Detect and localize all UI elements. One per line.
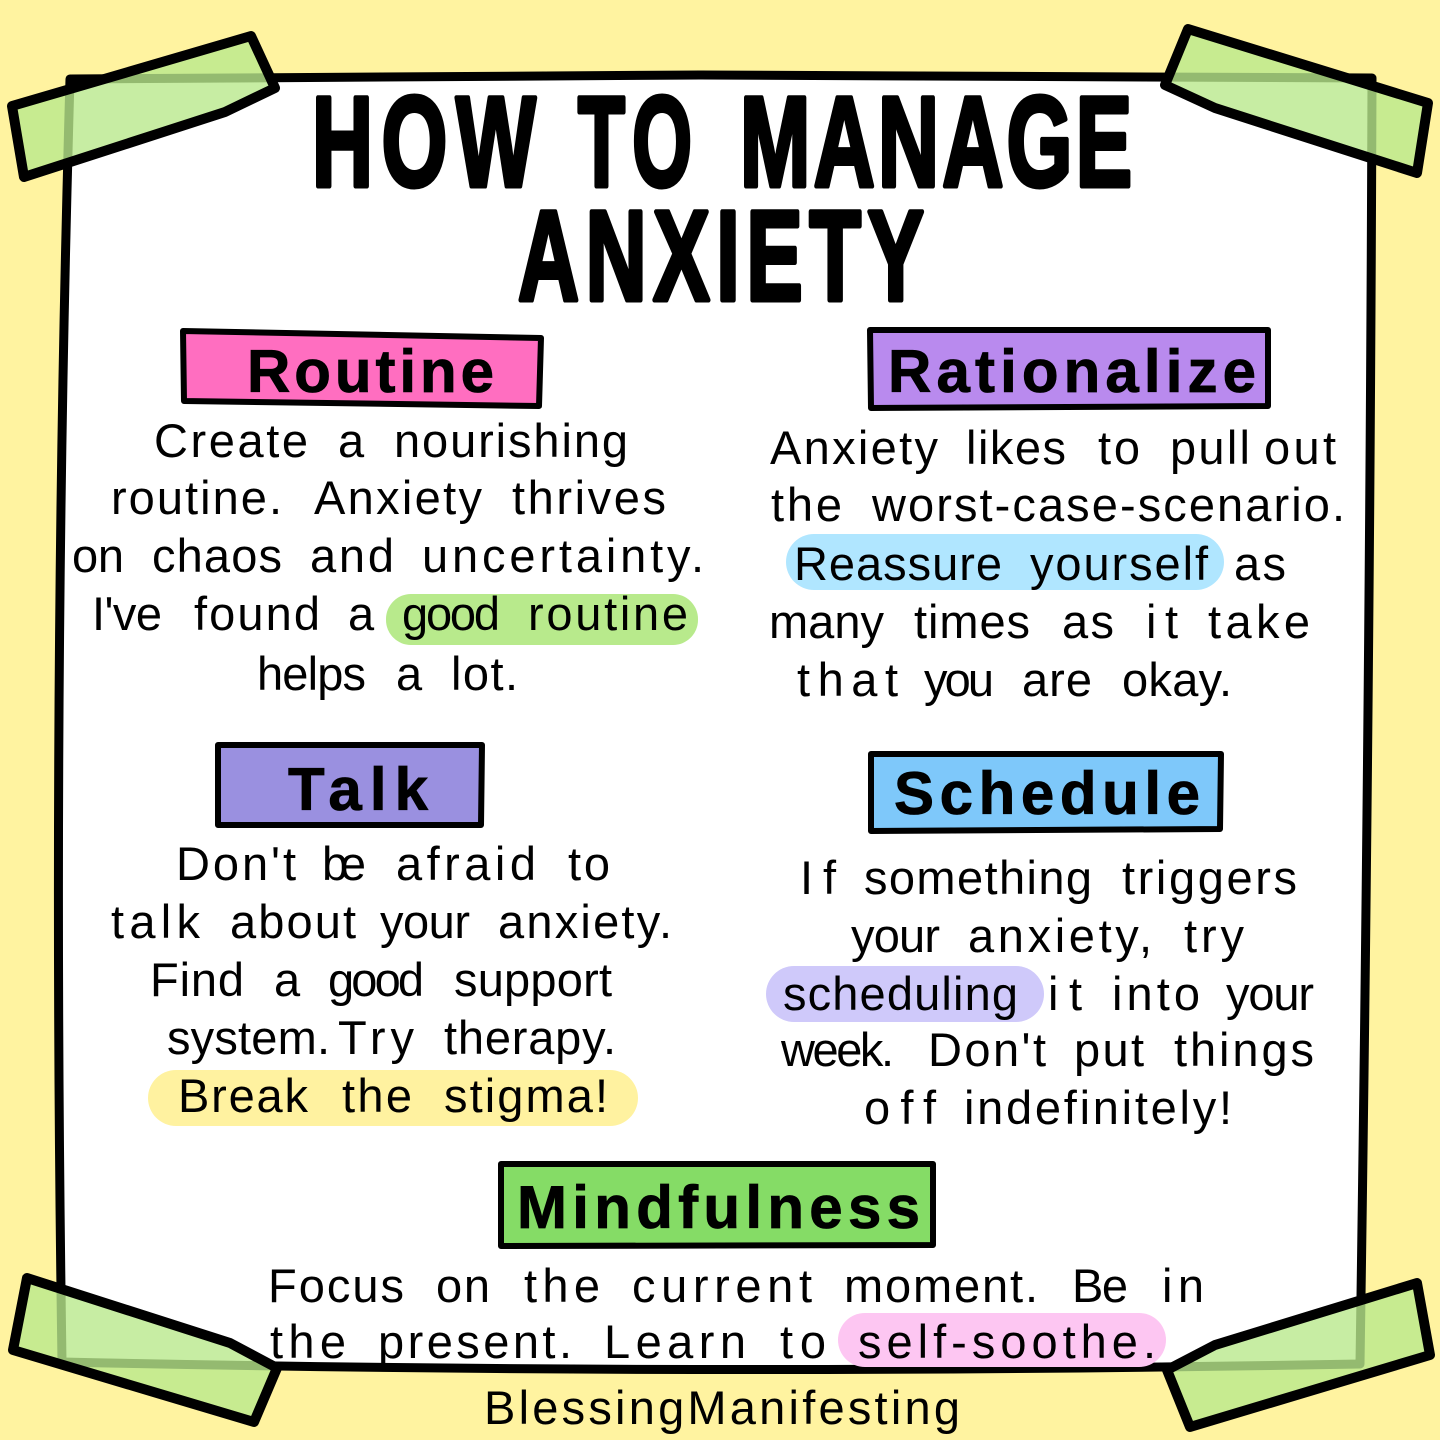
rationalize body text — [769, 421, 1345, 706]
talk body text: to — [568, 837, 610, 890]
schedule heading banner: Schedule — [894, 760, 1200, 827]
highlight: good routine — [386, 594, 698, 645]
rationalize body text: as — [1234, 537, 1286, 590]
routine body text: good — [402, 587, 500, 640]
rationalize body text: it — [1146, 595, 1178, 648]
mindfulness body text: in — [1162, 1259, 1204, 1312]
rationalize body text: Anxiety — [770, 421, 938, 474]
routine body text: nourishing — [394, 414, 628, 467]
mindfulness body text: Learn — [604, 1315, 746, 1368]
mindfulness body text: the — [270, 1315, 346, 1368]
routine body text: uncertainty. — [422, 529, 704, 582]
rationalize body text: take — [1208, 595, 1310, 648]
talk body text: Don't — [176, 837, 296, 890]
routine body text: helps — [257, 647, 366, 700]
talk heading banner: Talk — [288, 756, 429, 823]
schedule body text: scheduling — [783, 967, 1018, 1020]
highlight: reassure yourself — [786, 534, 1224, 590]
title — [312, 70, 1132, 327]
talk body text: afraid — [396, 837, 536, 890]
rationalize body text: yourself — [1030, 537, 1209, 590]
mindfulness heading banner: Mindfulness — [517, 1174, 920, 1241]
schedule body text: your — [851, 909, 940, 962]
highlight: scheduling — [766, 966, 1044, 1022]
mindfulness body text — [268, 1259, 1204, 1368]
schedule body text: it — [1048, 967, 1082, 1020]
routine body text — [72, 414, 704, 700]
talk body text: system. — [167, 1011, 330, 1064]
schedule body text: triggers — [1122, 851, 1297, 904]
talk body text: the — [342, 1069, 412, 1122]
schedule body text: week. — [780, 1023, 894, 1076]
talk body text: stigma! — [444, 1069, 608, 1122]
tape: top right — [1165, 29, 1428, 173]
schedule body text: If — [800, 851, 837, 904]
tape: bottom right — [1167, 1283, 1430, 1427]
schedule body text: try — [1184, 909, 1244, 962]
panel: mindfulness — [268, 1164, 1204, 1368]
highlight: break the stigma — [148, 1070, 638, 1126]
rationalize body text: to — [1098, 421, 1140, 474]
panel: schedule — [766, 754, 1314, 1134]
mindfulness body text: self-soothe. — [858, 1315, 1156, 1368]
routine body text: lot. — [451, 647, 518, 700]
routine body text: I've — [92, 587, 162, 640]
schedule body text: your — [1226, 967, 1314, 1020]
panel: talk — [111, 745, 672, 1126]
routine body text: on — [72, 529, 124, 582]
routine heading banner: Routine — [247, 338, 494, 405]
rationalize body text: times — [914, 595, 1030, 648]
tape: bottom left — [13, 1278, 277, 1422]
rationalize body text: likes — [966, 421, 1066, 474]
title: HOW — [312, 70, 536, 213]
mindfulness body text: the — [524, 1259, 600, 1312]
routine body text: a — [348, 587, 375, 640]
schedule body text — [780, 851, 1314, 1134]
panel: routine — [72, 331, 704, 700]
rationalize heading banner: Rationalize — [888, 338, 1256, 405]
rationalize body text: many — [769, 595, 884, 648]
routine heading banner — [183, 331, 541, 406]
rationalize body text: as — [1062, 595, 1114, 648]
rationalize body text: the — [771, 478, 842, 531]
mindfulness body text: on — [436, 1259, 490, 1312]
schedule body text: things — [1174, 1023, 1314, 1076]
title: TO — [578, 71, 692, 214]
routine body text: routine. — [111, 471, 282, 524]
talk body text: about — [230, 895, 356, 948]
mindfulness body text: current — [632, 1259, 812, 1312]
talk body text — [111, 837, 672, 1122]
talk heading banner — [218, 745, 482, 825]
title: ANXIETY — [518, 184, 924, 327]
routine body text: Create — [154, 414, 308, 467]
rationalize body text: Reassure — [794, 537, 1002, 590]
rationalize body text: out — [1264, 421, 1336, 474]
panel: rationalize — [769, 330, 1345, 706]
talk body text: support — [454, 953, 612, 1006]
rationalize body text: that — [797, 653, 898, 706]
talk body text: Find — [150, 953, 244, 1006]
talk body text: Break — [178, 1069, 308, 1122]
talk body text: anxiety. — [498, 895, 672, 948]
routine body text: chaos — [152, 529, 282, 582]
mindfulness body text: Be — [1072, 1259, 1128, 1312]
schedule body text: put — [1074, 1023, 1144, 1076]
schedule body text: indefinitely! — [964, 1081, 1232, 1134]
talk body text: Try — [338, 1011, 414, 1064]
schedule body text: anxiety, — [968, 909, 1152, 962]
routine body text: and — [310, 529, 394, 582]
talk body text: be — [322, 837, 366, 890]
schedule body text: Don't — [928, 1023, 1046, 1076]
mindfulness body text: moment. — [844, 1259, 1038, 1312]
talk body text: therapy. — [444, 1011, 616, 1064]
mindfulness body text: to — [780, 1315, 826, 1368]
talk body text: talk — [111, 895, 200, 948]
highlight: self-soothe — [838, 1313, 1166, 1367]
tape: top left — [12, 36, 275, 177]
rationalize body text: you — [924, 653, 994, 706]
signature: BlessingManifesting — [484, 1381, 960, 1434]
rationalize body text: are — [1022, 653, 1092, 706]
routine body text: a — [396, 647, 423, 700]
talk body text: good — [328, 953, 424, 1006]
routine body text: found — [194, 587, 320, 640]
talk body text: a — [274, 953, 301, 1006]
rationalize body text: okay. — [1122, 653, 1232, 706]
schedule body text: into — [1112, 967, 1200, 1020]
routine body text: routine — [528, 587, 688, 640]
routine body text: a — [338, 414, 365, 467]
talk body text: your — [380, 895, 470, 948]
routine body text: thrives — [512, 471, 666, 524]
schedule body text: something — [864, 851, 1092, 904]
schedule body text: off — [864, 1081, 937, 1134]
rationalize body text: worst-case-scenario. — [871, 478, 1345, 531]
rationalize body text: pull — [1170, 421, 1250, 474]
title: MANAGE — [740, 70, 1132, 213]
routine body text: Anxiety — [314, 471, 482, 524]
mindfulness body text: present. — [378, 1315, 572, 1368]
mindfulness body text: Focus — [268, 1259, 404, 1312]
